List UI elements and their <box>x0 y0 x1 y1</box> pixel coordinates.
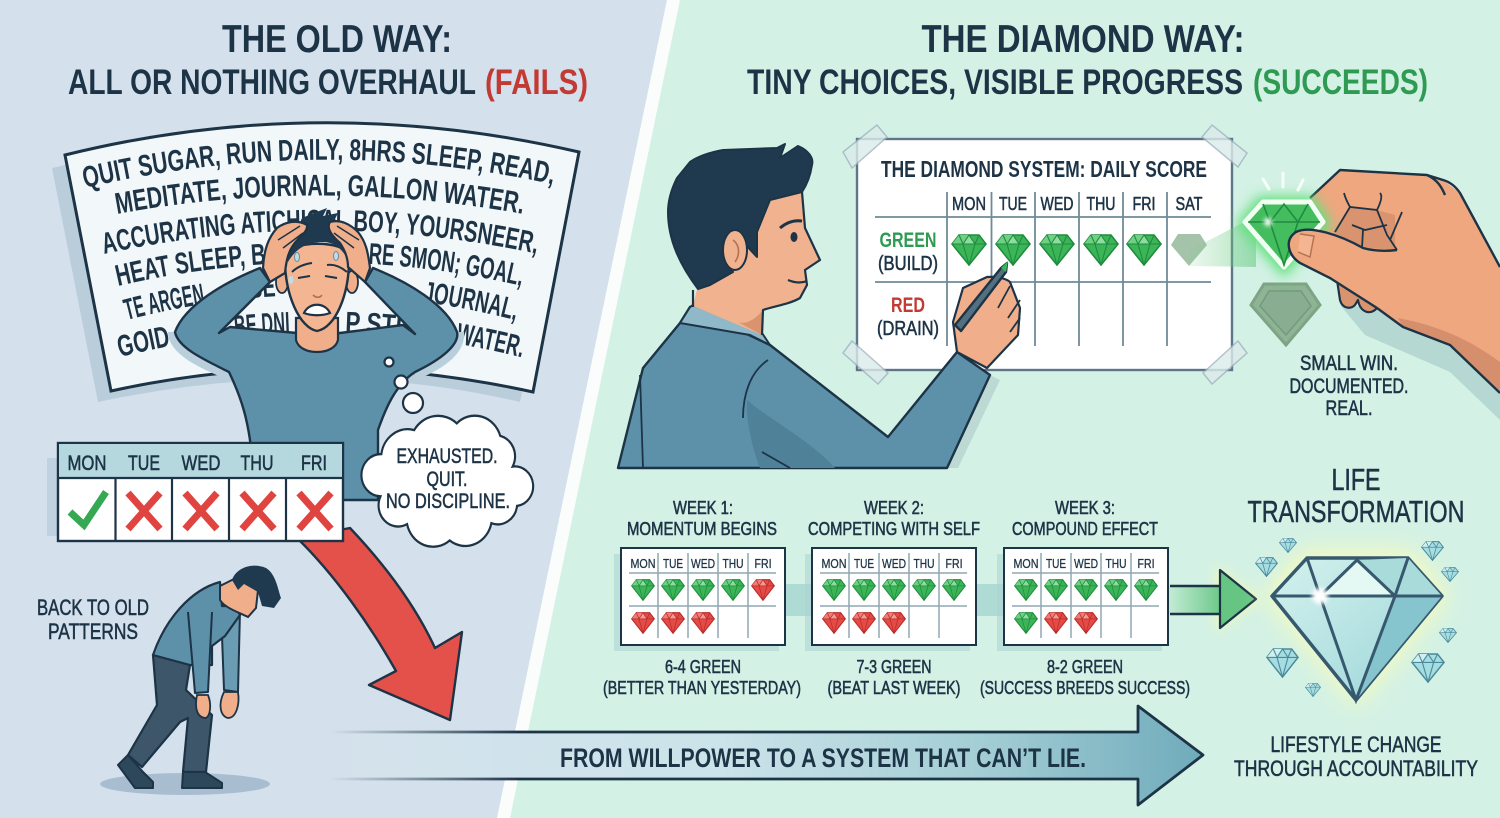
life transformation heading: LIFE <box>1332 462 1380 497</box>
weekday labels: THU <box>1086 194 1116 214</box>
week 2 heading: COMPETING WITH SELF <box>808 519 980 539</box>
weekday labels <box>952 194 1203 214</box>
panel divider <box>497 0 680 818</box>
week 1 caption: (BETTER THAN YESTERDAY) <box>603 678 801 698</box>
week connector bands <box>770 584 1020 616</box>
week 3 heading: COMPOUND EFFECT <box>1012 519 1158 539</box>
thought bubble <box>361 358 533 547</box>
week 1 card: WED <box>691 557 715 571</box>
paper goal list text: P STI <box>346 312 401 331</box>
week 2 caption: (BEAT LAST WEEK) <box>828 678 960 698</box>
small win caption: SMALL WIN. <box>1300 352 1398 375</box>
overwhelming goals paper <box>52 121 581 402</box>
week 1 heading: MOMENTUM BEGINS <box>627 519 777 539</box>
week 3 caption: 8-2 GREEN <box>1047 657 1123 677</box>
week 1 card: THU <box>722 557 744 571</box>
row labels: (DRAIN) <box>877 318 939 340</box>
arrow message: FROM WILLPOWER TO A SYSTEM THAT CAN’T LIE. <box>560 743 1086 773</box>
title: the old way: ALL OR NOTHING OVERHAUL <box>68 63 476 102</box>
small win caption <box>1290 352 1408 420</box>
week 2 card: THU <box>914 557 934 571</box>
row labels: RED <box>891 294 925 317</box>
row labels: (BUILD) <box>878 253 938 275</box>
failed week tracker: MON <box>68 452 106 475</box>
failed week tracker: TUE <box>128 452 160 475</box>
paper goal list text: RE SMON; GOAL, <box>370 243 522 290</box>
red falling arrow <box>297 528 462 720</box>
title: the diamond way <box>747 18 1428 102</box>
failed week tracker <box>47 443 343 541</box>
chart title: THE DIAMOND SYSTEM: DAILY SCORE <box>881 156 1207 182</box>
light beam to held gem <box>1190 216 1256 267</box>
week 1 card: FRI <box>754 557 772 571</box>
week 1 progress <box>603 498 801 698</box>
lifestyle change caption: LIFESTYLE CHANGE <box>1270 732 1442 757</box>
paper goal list text <box>83 139 553 358</box>
small win caption: DOCUMENTED. <box>1290 375 1408 398</box>
title: the diamond way: THE DIAMOND WAY: <box>922 18 1244 61</box>
week 1 card <box>614 548 785 651</box>
paper goal list text: BE <box>256 284 276 298</box>
week 2 card: TUE <box>854 557 874 571</box>
week 2 heading <box>808 498 980 539</box>
title: the diamond way: TINY CHOICES, VISIBLE PROGRESS <box>747 63 1243 102</box>
week 3 card: TUE <box>1046 557 1066 571</box>
week 2 card: WED <box>882 557 906 571</box>
week 2 card <box>805 548 976 651</box>
green arrow to transformation <box>1169 566 1260 632</box>
weekday labels: SAT <box>1176 194 1203 214</box>
weekday labels: WED <box>1040 194 1074 214</box>
paper goal list text: TE ARGEN <box>122 284 204 320</box>
week 1 heading <box>627 498 777 539</box>
failed week tracker: THU <box>240 452 274 475</box>
week 2 card: FRI <box>946 557 962 571</box>
held green emerald <box>1236 173 1332 278</box>
diamond system chart <box>843 125 1247 384</box>
week 2 caption <box>828 657 960 698</box>
thought text: NO DISCIPLINE. <box>386 490 510 513</box>
failed week tracker: FRI <box>301 452 327 475</box>
weekday labels: TUE <box>999 194 1027 214</box>
thought text <box>386 445 510 513</box>
background: diamond way panel <box>510 0 1500 818</box>
week 3 card: MON <box>1014 557 1038 571</box>
red crosses <box>128 493 331 529</box>
paper goal list text: MEDITATE, JOURNAL, GALLON WATER. <box>114 174 522 214</box>
week 1 caption: 6-4 GREEN <box>665 657 741 677</box>
week 3 card <box>997 548 1168 651</box>
week 3 caption: (SUCCESS BREEDS SUCCESS) <box>980 678 1190 698</box>
weekday labels: MON <box>952 194 986 214</box>
week 1 card: MON <box>630 557 656 571</box>
week 2 heading: WEEK 2: <box>864 498 924 518</box>
week 3 heading: WEEK 3: <box>1055 498 1115 518</box>
thumb <box>1289 230 1400 300</box>
week 1 card: TUE <box>663 557 683 571</box>
week 3 progress <box>980 498 1190 698</box>
life transformation heading <box>1248 462 1464 529</box>
background: old way panel <box>0 0 667 818</box>
week 3 card: THU <box>1106 557 1126 571</box>
failed week tracker: WED <box>182 452 220 475</box>
title: the old way: THE OLD WAY: <box>222 18 452 61</box>
small floating diamonds <box>1256 538 1458 697</box>
green gems <box>952 234 1207 266</box>
week 2 progress <box>805 498 980 698</box>
thought text: EXHAUSTED. <box>396 445 498 468</box>
stressed man holding head <box>172 208 460 500</box>
small win caption: REAL. <box>1326 397 1372 420</box>
lifestyle change caption <box>1234 732 1478 781</box>
paper goal list text: BE DNI <box>234 312 289 331</box>
week 3 card: WED <box>1074 557 1098 571</box>
week 1 caption <box>603 657 801 698</box>
green check <box>70 492 106 525</box>
weekday labels: FRI <box>1132 194 1156 214</box>
paper goal list text: ACCURATING ATICHICAL BOY, YOURSNEER, <box>104 210 536 258</box>
week 2 card: MON <box>822 557 846 571</box>
large hand holding gem <box>1236 170 1500 420</box>
row labels: GREEN <box>880 229 936 252</box>
paper goal list text: HEAT SLEEP, B <box>114 244 264 286</box>
paper goal list text: QUIT SUGAR, RUN DAILY, 8HRS SLEEP, READ, <box>83 139 553 192</box>
row labels <box>877 229 939 340</box>
back to old patterns label: PATTERNS <box>48 619 138 644</box>
hand holding pen <box>953 261 1020 368</box>
title: the old way: (FAILS) <box>485 63 588 102</box>
week 3 card: FRI <box>1138 557 1154 571</box>
back to old patterns label: BACK TO OLD <box>37 595 149 620</box>
week 3 heading <box>1012 498 1158 539</box>
defeated slumped man <box>100 566 281 795</box>
title: the diamond way: (SUCCEEDS) <box>1253 63 1428 102</box>
week 3 caption <box>980 657 1190 698</box>
week 2 caption: 7-3 GREEN <box>856 657 932 677</box>
paper goal list text: GOID <box>118 327 168 356</box>
paper goal list text: WATER. <box>458 323 522 358</box>
week 1 heading: WEEK 1: <box>673 498 733 518</box>
glowing large diamond <box>1264 550 1450 708</box>
thought text: QUIT. <box>426 468 468 491</box>
tape corners <box>843 125 1247 384</box>
paper goal list text: JOURNAL, <box>428 282 516 324</box>
placeholder gem shadow <box>1251 284 1320 345</box>
big progress arrow <box>330 706 1203 805</box>
title: the old way <box>68 18 588 102</box>
back to old patterns label <box>37 595 149 644</box>
man marking the chart <box>618 144 1020 468</box>
